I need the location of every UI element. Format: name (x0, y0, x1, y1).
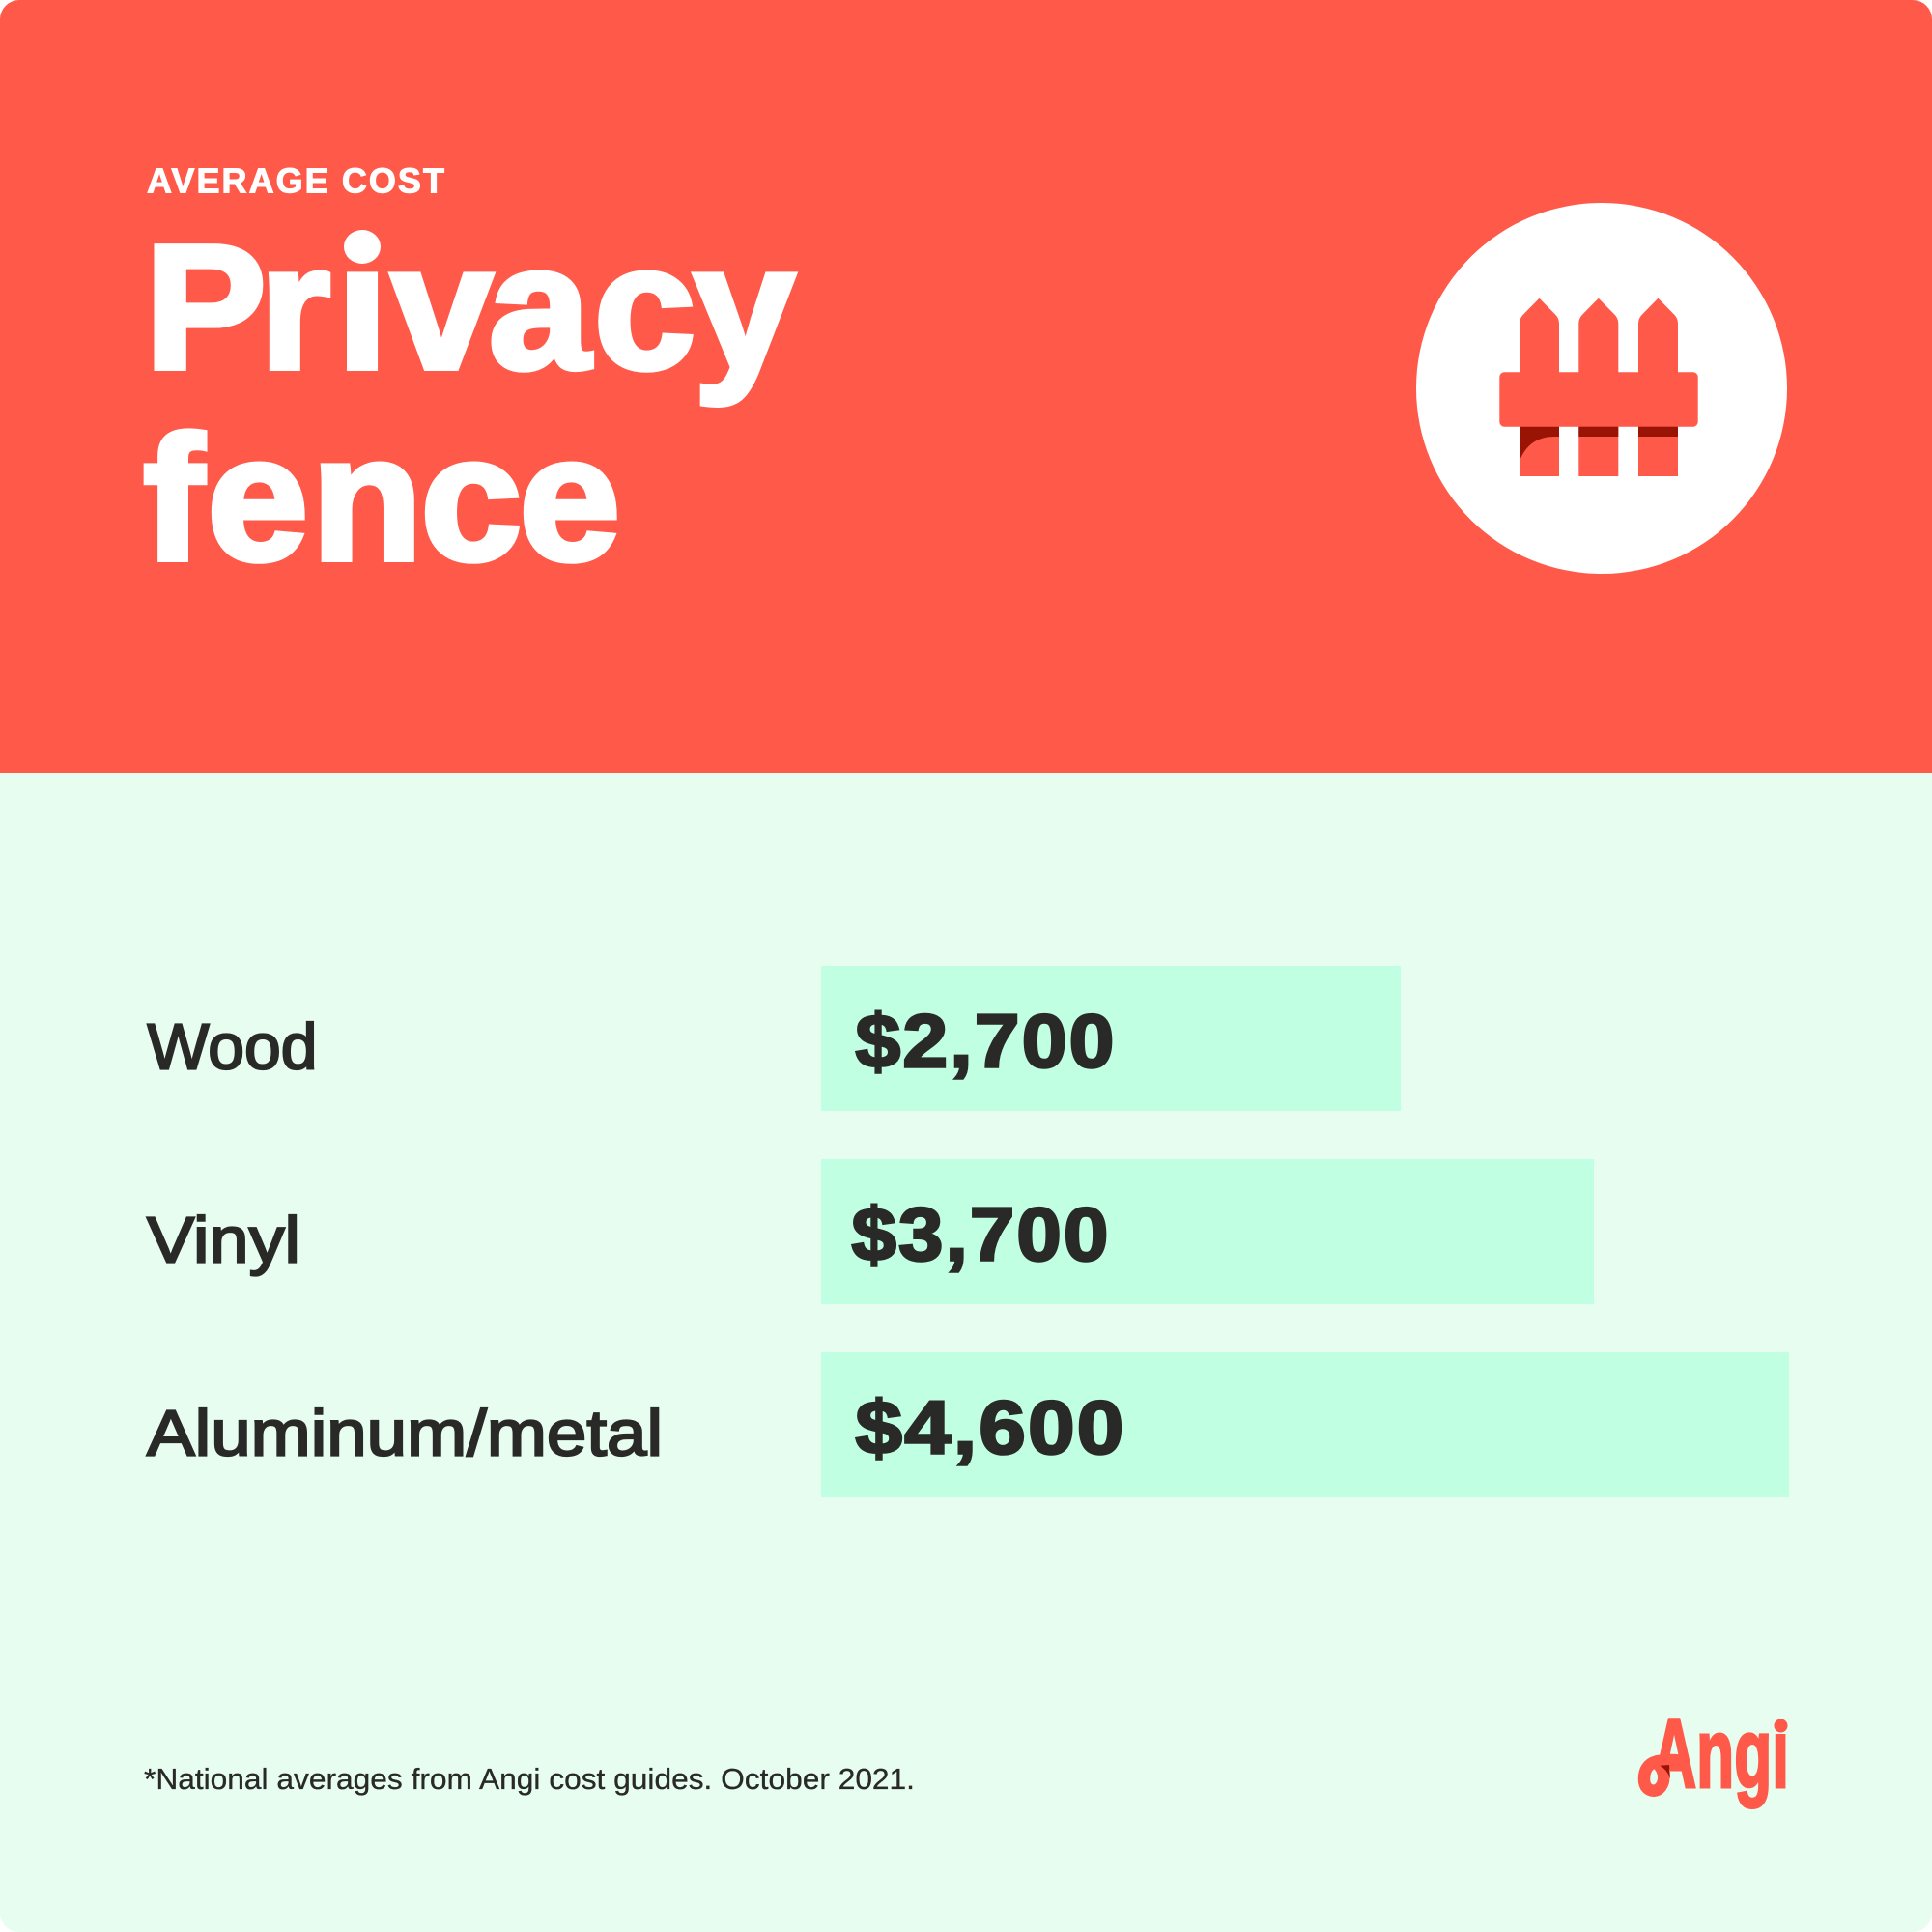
value: wood: $2,700 (856, 999, 1117, 1084)
value: aluminum/metal: $4,600 (856, 1385, 1126, 1470)
bar: aluminum/metal (821, 1352, 1789, 1497)
title (144, 209, 795, 597)
panel: cost list background (0, 773, 1932, 1932)
logo: Angi (1638, 1718, 1787, 1809)
label: wood: Wood (147, 1010, 317, 1084)
label: vinyl: Vinyl (147, 1204, 300, 1277)
title: Privacy (145, 209, 795, 406)
bar: wood (821, 966, 1401, 1111)
eyebrow heading: AVERAGE COST (147, 160, 444, 201)
row: wood (147, 966, 1401, 1111)
row: vinyl (147, 1159, 1594, 1304)
logo: Angi: Angi (1652, 1698, 1789, 1808)
label: aluminum/metal: Aluminum/metal (147, 1397, 663, 1470)
title: fence (144, 400, 620, 597)
value: vinyl: $3,700 (852, 1192, 1111, 1277)
row: aluminum/metal (147, 1352, 1789, 1497)
icon: fence in white circle (1416, 203, 1787, 574)
bar: vinyl (821, 1159, 1594, 1304)
footnote: *National averages from Angi cost guides. October 2021. (144, 1762, 915, 1796)
panel: header background (0, 0, 1932, 773)
